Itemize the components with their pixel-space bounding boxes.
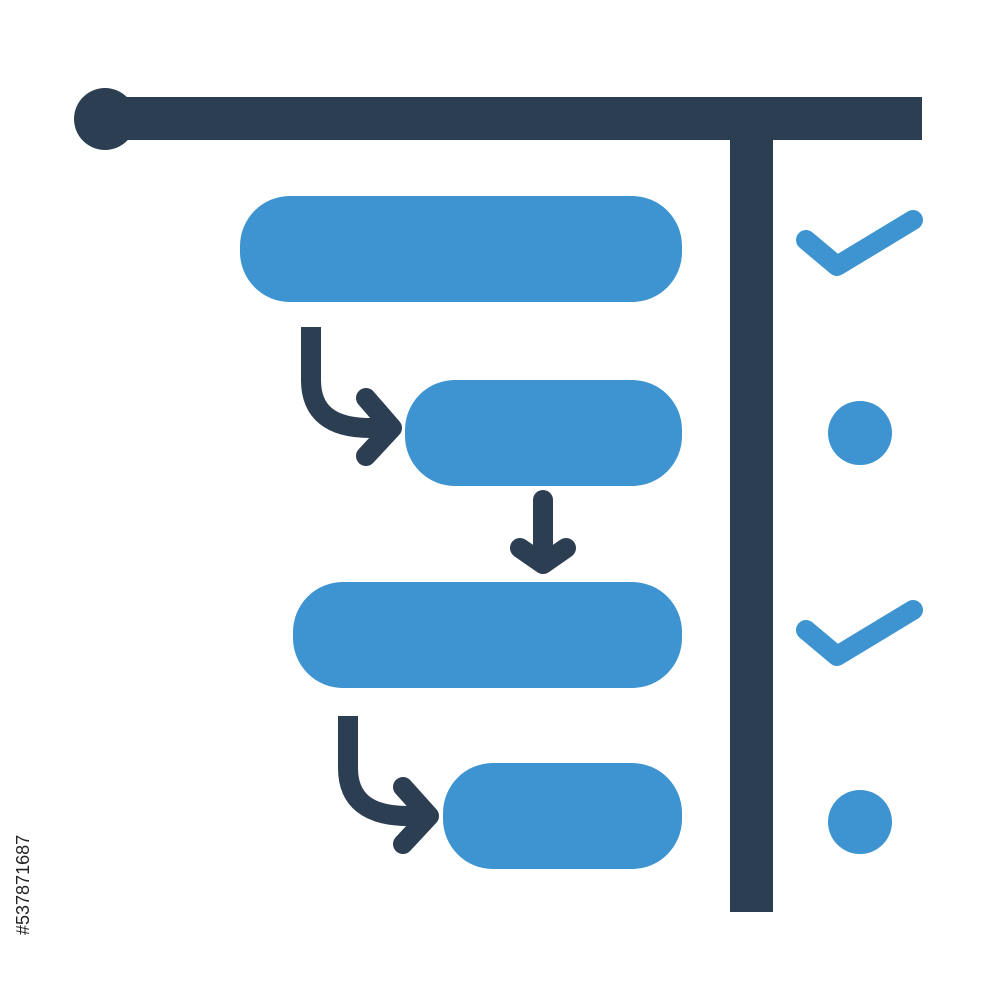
box 2 [405, 380, 682, 486]
top horizontal bar [74, 88, 922, 150]
icon: dot 2 [828, 790, 892, 854]
icon: check 1 [806, 220, 913, 266]
box 4 [443, 763, 682, 869]
icon: check 2 [806, 610, 913, 656]
stock id text: #537871687 [13, 835, 33, 935]
box 1 [240, 196, 682, 302]
icon: dot 1 [828, 401, 892, 465]
box 3 [293, 582, 682, 688]
arrow: curved to box 4 [348, 716, 429, 844]
arrow: curved to box 2 [311, 327, 392, 456]
vertical bar [730, 138, 773, 912]
arrow: down to box 3 [520, 500, 566, 564]
